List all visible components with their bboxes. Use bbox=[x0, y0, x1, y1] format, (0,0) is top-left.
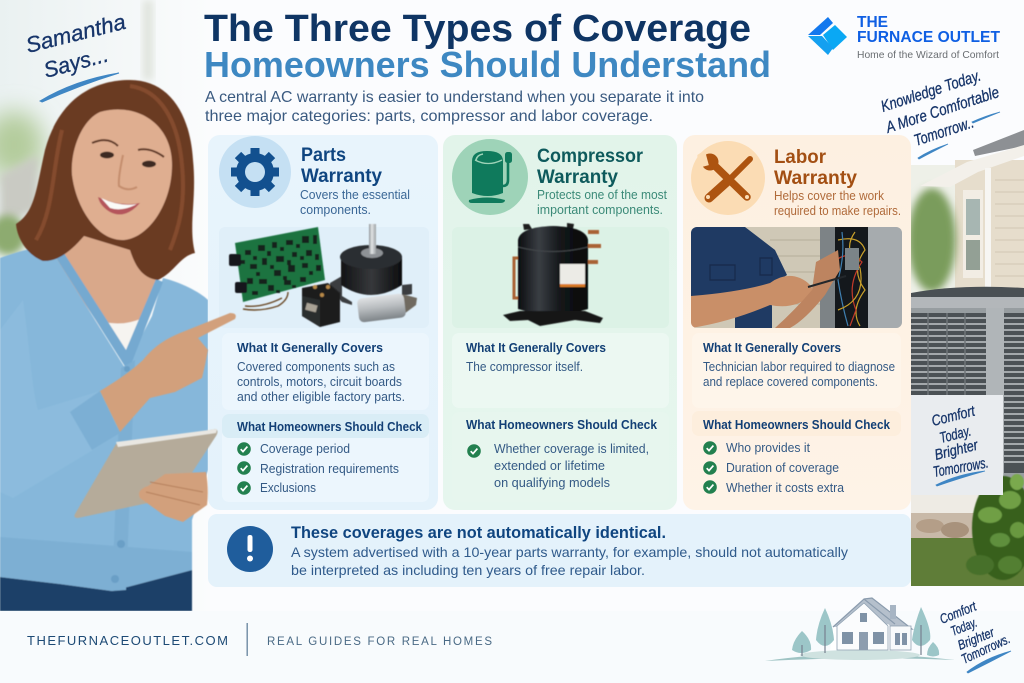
what to check: What Homeowners Should Check bbox=[237, 419, 423, 434]
intro text: three major categories: parts, compressor and labor coverage. bbox=[205, 108, 653, 125]
handwritten slogan: Comfort Today: Brighter bbox=[956, 624, 997, 653]
sign on AC unit: Brighter bbox=[933, 437, 980, 464]
what it covers: and replace covered components. bbox=[703, 374, 878, 389]
panel: compressor warranty bbox=[443, 135, 677, 510]
callout: A system advertised with a 10-year parts warranty, for example, should not automatically bbox=[291, 544, 848, 560]
what it covers: What It Generally Covers bbox=[237, 340, 383, 355]
what it covers: What It Generally Covers bbox=[703, 340, 841, 355]
what to check: Who provides it bbox=[726, 440, 810, 455]
icon: blue diamond bbox=[808, 17, 847, 55]
what it covers: controls, motors, circuit boards bbox=[237, 374, 402, 389]
heading: Parts bbox=[301, 145, 346, 166]
handwritten slogan: Knowledge Today: Tomorrow.. bbox=[912, 114, 976, 150]
background photo: house and AC unit at right bbox=[908, 130, 1024, 586]
what to check bbox=[222, 414, 429, 502]
pointing hand and forearm bbox=[100, 313, 236, 432]
logo: The Furnace Outlet: THE bbox=[857, 14, 888, 31]
jeans bbox=[0, 565, 192, 611]
blue cardigan bbox=[0, 247, 208, 591]
what to check: extended or lifetime bbox=[494, 458, 605, 473]
what to check: What Homeowners Should Check bbox=[703, 417, 891, 432]
subtitle: Protects one of the most bbox=[537, 188, 667, 202]
neck and chest bbox=[55, 225, 160, 365]
logo: The Furnace Outlet: FURNACE OUTLET bbox=[857, 29, 1001, 46]
logo: The Furnace Outlet bbox=[808, 14, 1001, 61]
background photo: blurred garden at left bbox=[0, 0, 210, 611]
compressor feet bbox=[503, 311, 603, 326]
callout: be interpreted as including ten years of free repair labor. bbox=[291, 562, 645, 578]
what it covers bbox=[692, 333, 901, 408]
callout: These coverages are not automatically identical. bbox=[291, 523, 666, 542]
handwritten slogan: Comfort Today: Comfort bbox=[938, 598, 979, 627]
tablet bbox=[74, 429, 218, 518]
what it covers: and other eligible factory parts. bbox=[237, 389, 405, 404]
heading bbox=[537, 146, 644, 188]
heading bbox=[774, 147, 857, 189]
heading: Warranty bbox=[537, 167, 618, 188]
intro text bbox=[205, 89, 704, 125]
subtitle: important components. bbox=[537, 203, 663, 217]
what to check: Whether it costs extra bbox=[726, 480, 845, 495]
title: Homeowners Should Understand bbox=[204, 44, 771, 85]
footer bbox=[0, 598, 1024, 683]
what to check: Duration of coverage bbox=[726, 460, 839, 475]
icon: exclamation bbox=[227, 526, 273, 572]
contactor bbox=[302, 283, 340, 327]
callout bbox=[208, 514, 911, 587]
subtitle bbox=[300, 188, 410, 217]
image: technician photo bbox=[691, 227, 902, 328]
title bbox=[204, 8, 771, 85]
house sketch bbox=[765, 598, 955, 661]
compressor data label bbox=[560, 264, 585, 287]
what it covers bbox=[452, 333, 669, 408]
logo: The Furnace Outlet: Home of the Wizard of Comfort bbox=[857, 49, 999, 61]
holding hand bbox=[139, 472, 208, 522]
image: parts photo bbox=[219, 224, 429, 328]
handwritten slogan: Knowledge Today: Knowledge Today. bbox=[879, 67, 983, 116]
heading: Labor bbox=[774, 147, 827, 168]
footer: REAL GUIDES FOR REAL HOMES bbox=[267, 636, 492, 648]
motor bbox=[330, 224, 412, 305]
panel: labor warranty bbox=[683, 135, 911, 510]
handwritten slogan: Knowledge Today: A More Comfortable bbox=[883, 84, 1002, 137]
what it covers: The compressor itself. bbox=[466, 359, 583, 374]
what to check: Registration requirements bbox=[260, 461, 399, 476]
sign on AC unit bbox=[911, 395, 1003, 495]
person: pointing arm and tablet, overlapping the parts panel bbox=[74, 313, 236, 522]
white undershirt bbox=[92, 316, 147, 360]
person: Samantha bbox=[0, 80, 208, 611]
sign on AC unit: Tomorrows. bbox=[932, 454, 990, 481]
what to check: Whether coverage is limited, bbox=[494, 441, 649, 456]
sign on AC unit: Today. bbox=[938, 423, 973, 447]
handwritten slogan: Comfort Today: Today. bbox=[949, 615, 979, 639]
what to check: What Homeowners Should Check bbox=[466, 417, 658, 432]
subtitle: components. bbox=[300, 203, 371, 217]
title: The Three Types of Coverage bbox=[204, 8, 751, 50]
subtitle: Covers the essential bbox=[300, 188, 410, 202]
capacitor bbox=[357, 293, 417, 323]
image: compressor photo bbox=[452, 223, 669, 328]
heading: Warranty bbox=[301, 166, 382, 187]
heading bbox=[301, 145, 382, 187]
subtitle: required to make repairs. bbox=[774, 204, 901, 218]
icon: wrench and screwdriver bbox=[691, 141, 765, 215]
heading: Warranty bbox=[774, 168, 857, 189]
face bbox=[72, 109, 172, 240]
handwritten slogan: Knowledge Today bbox=[879, 67, 1002, 159]
what to check bbox=[452, 412, 669, 502]
handwritten note: Samantha Says: Says... bbox=[41, 42, 111, 83]
intro text: A central AC warranty is easier to understand when you separate it into bbox=[205, 89, 704, 106]
what it covers: Technician labor required to diagnose bbox=[703, 359, 895, 374]
handwritten note: Samantha Says bbox=[23, 9, 128, 102]
footer: THEFURNACEOUTLET.COM bbox=[27, 633, 228, 648]
sign on AC unit: Comfort bbox=[930, 403, 977, 430]
heading: Compressor bbox=[537, 146, 644, 167]
panel: parts warranty bbox=[208, 135, 438, 510]
what it covers: Covered components such as bbox=[237, 359, 395, 374]
button band bbox=[112, 360, 135, 591]
sleeve bbox=[0, 300, 120, 498]
subtitle: Helps cover the work bbox=[774, 189, 885, 203]
what to check: Exclusions bbox=[260, 480, 316, 495]
icon: gear bbox=[219, 136, 291, 208]
what to check bbox=[692, 411, 901, 495]
handwritten slogan: Comfort Today bbox=[938, 598, 1012, 673]
hair back bbox=[16, 80, 195, 280]
subtitle bbox=[537, 188, 667, 217]
what to check: on qualifying models bbox=[494, 475, 610, 490]
icon: compressor bbox=[452, 139, 528, 215]
subtitle bbox=[774, 189, 901, 218]
what to check: Coverage period bbox=[260, 441, 350, 456]
handwritten note: Samantha Says: Samantha bbox=[23, 9, 128, 58]
what it covers: What It Generally Covers bbox=[466, 340, 606, 355]
what it covers bbox=[222, 333, 429, 410]
circuit board bbox=[229, 227, 325, 310]
